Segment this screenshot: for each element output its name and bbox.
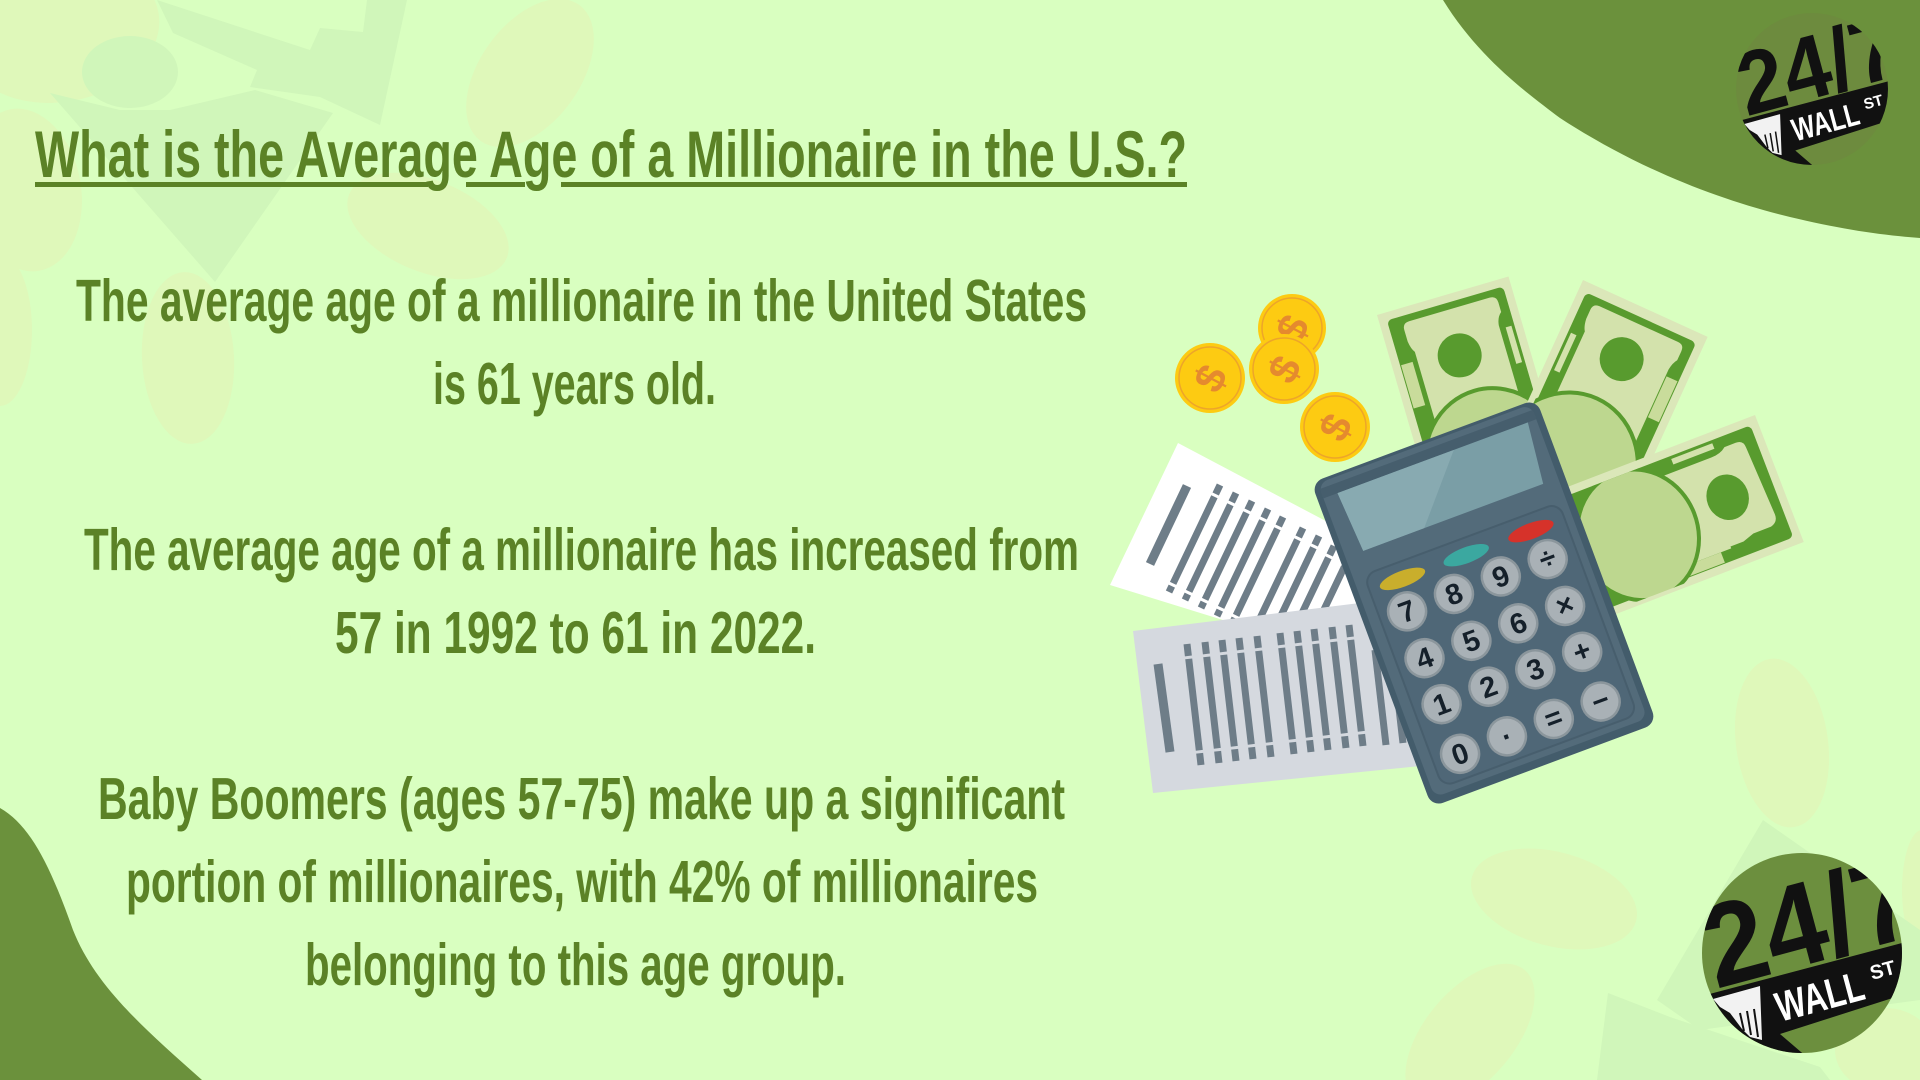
icon: banknote right: [1527, 280, 1708, 486]
icon: gold coins: $: [1266, 307, 1319, 350]
logo: 24/7 Wall St top right: [1738, 24, 1888, 165]
decorative blob: bottom left corner: [0, 808, 202, 1080]
keypad: 6: [1505, 606, 1532, 642]
icon: gold coins: $: [1184, 357, 1237, 400]
text block: average age: The average age of a millionaire in the United States: [76, 268, 1087, 334]
keypad: 3: [1523, 652, 1549, 688]
logo: 24/7 Wall St bottom right: ST: [1868, 957, 1898, 985]
function buttons: [1377, 515, 1556, 595]
keypad: 0: [1447, 737, 1474, 773]
decorative blob: top right corner: [1443, 0, 1920, 238]
text block: age increase: [84, 517, 1079, 666]
keypad: +: [1569, 634, 1596, 670]
icon: banknote horizontal: [1568, 415, 1804, 614]
icon: banknote left: [1377, 276, 1538, 444]
illustration: money and calculator: [1110, 275, 1804, 807]
keypad: ·: [1497, 721, 1517, 754]
keypad: ÷: [1535, 541, 1561, 577]
keypad: 5: [1459, 624, 1485, 660]
text block: baby boomers: Baby Boomers (ages 57-75) make up a significant: [98, 766, 1065, 832]
text block: baby boomers: belonging to this age group.: [305, 932, 846, 998]
text block: average age: is 61 years old.: [433, 351, 716, 417]
icon: grey receipt: [1133, 600, 1430, 793]
keypad: 1: [1429, 687, 1455, 723]
icon: gold coins: $: [1309, 406, 1362, 449]
keypad: −: [1587, 684, 1614, 719]
keypad: [1383, 535, 1625, 778]
keypad: ×: [1552, 588, 1579, 624]
text block: age increase: 57 in 1992 to 61 in 2022.: [335, 600, 816, 666]
keypad: =: [1540, 701, 1567, 737]
icon: gold coins: $: [1258, 348, 1311, 391]
keypad: 7: [1394, 594, 1421, 630]
text block: baby boomers: portion of millionaires, with 42% of millionaires: [126, 849, 1038, 915]
logo: 24/7 Wall St top right: ST: [1862, 92, 1886, 113]
logo: 24/7 Wall St bottom right: [1702, 853, 1902, 1053]
icon: gold coins: [1175, 294, 1370, 462]
keypad: 4: [1412, 641, 1438, 677]
logo: 24/7 Wall St top right: WALL: [1788, 96, 1863, 148]
text block: average age: [76, 268, 1087, 417]
keypad: 8: [1441, 577, 1467, 613]
keypad: 9: [1488, 560, 1514, 595]
calculator screen: [1320, 410, 1558, 557]
title: What is the Average Age of a Millionaire in the U.S.?: [35, 117, 1187, 191]
logo: 24/7 Wall St bottom right: WALL: [1770, 962, 1869, 1031]
text block: age increase: The average age of a millionaire has increased from: [84, 517, 1079, 583]
icon: white receipt: [1110, 443, 1392, 662]
icon: calculator: [1311, 399, 1657, 807]
keypad: 2: [1476, 670, 1502, 705]
text block: baby boomers: [98, 766, 1065, 998]
